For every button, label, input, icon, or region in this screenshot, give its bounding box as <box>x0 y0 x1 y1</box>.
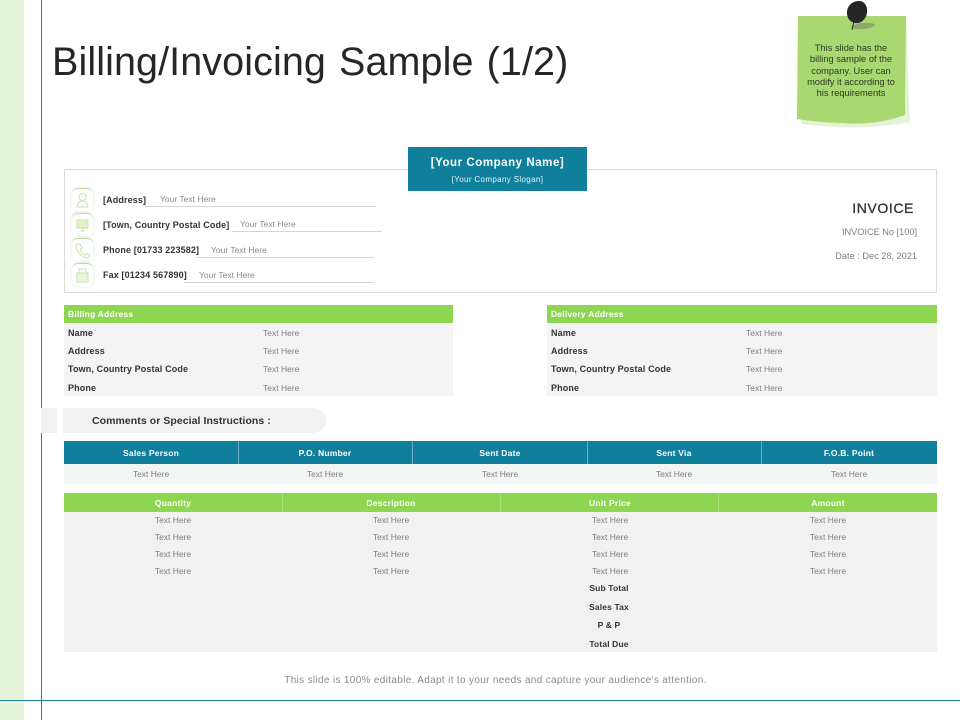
order header: Sent Date <box>479 448 521 458</box>
footer note: This slide is 100% editable. Adapt it to your needs and capture your audience's attention. <box>284 675 707 686</box>
icon: phone <box>72 238 93 261</box>
delivery address table: Phone <box>551 383 579 393</box>
sticky note text: his requirements <box>817 88 885 98</box>
delivery address table <box>547 305 937 396</box>
order details table: Text Here <box>307 469 343 479</box>
line items table: Text Here <box>810 532 846 542</box>
billing address table: Text Here <box>263 328 299 338</box>
billing address table: Text Here <box>263 383 299 393</box>
sticky note callout <box>797 1 910 128</box>
invoice date: Date : Dec 28, 2021 <box>835 251 917 261</box>
order details table <box>64 441 937 484</box>
line items table: Text Here <box>592 515 628 525</box>
line items table: Text Here <box>373 532 409 542</box>
sticky note text: company. User can <box>811 66 891 76</box>
fax label: Fax [01234 567890] <box>103 270 187 280</box>
invoice details <box>835 200 917 261</box>
title: Billing/Invoicing Sample (1/2) <box>52 40 568 84</box>
contact rows <box>71 187 382 287</box>
line items header: Amount <box>811 498 845 508</box>
line items table: Text Here <box>155 532 191 542</box>
line items header <box>64 493 937 512</box>
order details table: Text Here <box>482 469 518 479</box>
line items table: Text Here <box>155 566 191 576</box>
delivery address table: Text Here <box>746 364 782 374</box>
line items table: Text Here <box>373 566 409 576</box>
billing address table: Address <box>68 346 105 356</box>
order details table: Text Here <box>656 469 692 479</box>
town label: [Town, Country Postal Code] <box>103 220 229 230</box>
line items table: Text Here <box>373 515 409 525</box>
totals <box>589 583 629 649</box>
billing address table <box>64 305 453 396</box>
line items table: Text Here <box>373 549 409 559</box>
icon: town <box>72 213 93 236</box>
company name: [Your Company Name] <box>431 157 564 169</box>
delivery address table: Text Here <box>746 383 782 393</box>
invoice number: INVOICE No [100] <box>842 227 917 237</box>
sticky note text: billing sample of the <box>810 54 892 64</box>
totals: Sub Total <box>589 583 629 593</box>
comments heading: Comments or Special Instructions : <box>92 415 271 427</box>
billing address table: Name <box>68 328 93 338</box>
order details table: Text Here <box>133 469 169 479</box>
line items table: Text Here <box>155 515 191 525</box>
order details table: Text Here <box>831 469 867 479</box>
delivery address table: Text Here <box>746 328 782 338</box>
line items table: Text Here <box>155 549 191 559</box>
delivery header: Delivery Address <box>551 309 624 319</box>
totals: Sales Tax <box>589 602 629 612</box>
line items table: Text Here <box>592 566 628 576</box>
town placeholder: Your Text Here <box>240 219 296 229</box>
phone placeholder: Your Text Here <box>211 245 267 255</box>
delivery address table: Name <box>551 328 576 338</box>
order header: Sent Via <box>656 448 692 458</box>
order header: Sales Person <box>123 448 179 458</box>
order header: F.O.B. Point <box>824 448 874 458</box>
sticky note text: This slide has the <box>815 43 887 53</box>
line items header: Unit Price <box>589 498 631 508</box>
line items table: Text Here <box>810 515 846 525</box>
billing address table: Town, Country Postal Code <box>68 364 188 374</box>
delivery address table: Text Here <box>746 346 782 356</box>
sticky note text: modify it according to <box>807 77 895 87</box>
order header <box>64 441 937 464</box>
totals: P & P <box>598 620 620 630</box>
icon: fax <box>72 263 93 286</box>
billing address table: Text Here <box>263 364 299 374</box>
icon: address <box>72 188 93 211</box>
invoice header panel <box>64 169 937 293</box>
fax placeholder: Your Text Here <box>199 270 255 280</box>
invoice heading: INVOICE <box>852 200 914 216</box>
address placeholder: Your Text Here <box>160 194 216 204</box>
line items header: Description <box>366 498 416 508</box>
comments bar <box>41 408 326 433</box>
billing address table: Phone <box>68 383 96 393</box>
line items table: Text Here <box>592 532 628 542</box>
line items table <box>64 493 937 652</box>
totals: Total Due <box>589 639 629 649</box>
company slogan: [Your Company Slogan] <box>452 175 543 184</box>
company name banner <box>408 147 587 191</box>
billing header <box>64 305 453 323</box>
address label: [Address] <box>103 195 146 205</box>
delivery address table: Town, Country Postal Code <box>551 364 671 374</box>
sticky note text <box>807 43 895 98</box>
order header: P.O. Number <box>299 448 351 458</box>
line items table: Text Here <box>592 549 628 559</box>
delivery header <box>547 305 937 323</box>
billing address table: Text Here <box>263 346 299 356</box>
phone label: Phone [01733 223582] <box>103 245 199 255</box>
line items header: Quantity <box>155 498 191 508</box>
line items table: Text Here <box>810 566 846 576</box>
left accent strip <box>0 0 24 720</box>
line items table: Text Here <box>810 549 846 559</box>
billing header: Billing Address <box>68 309 133 319</box>
delivery address table: Address <box>551 346 588 356</box>
